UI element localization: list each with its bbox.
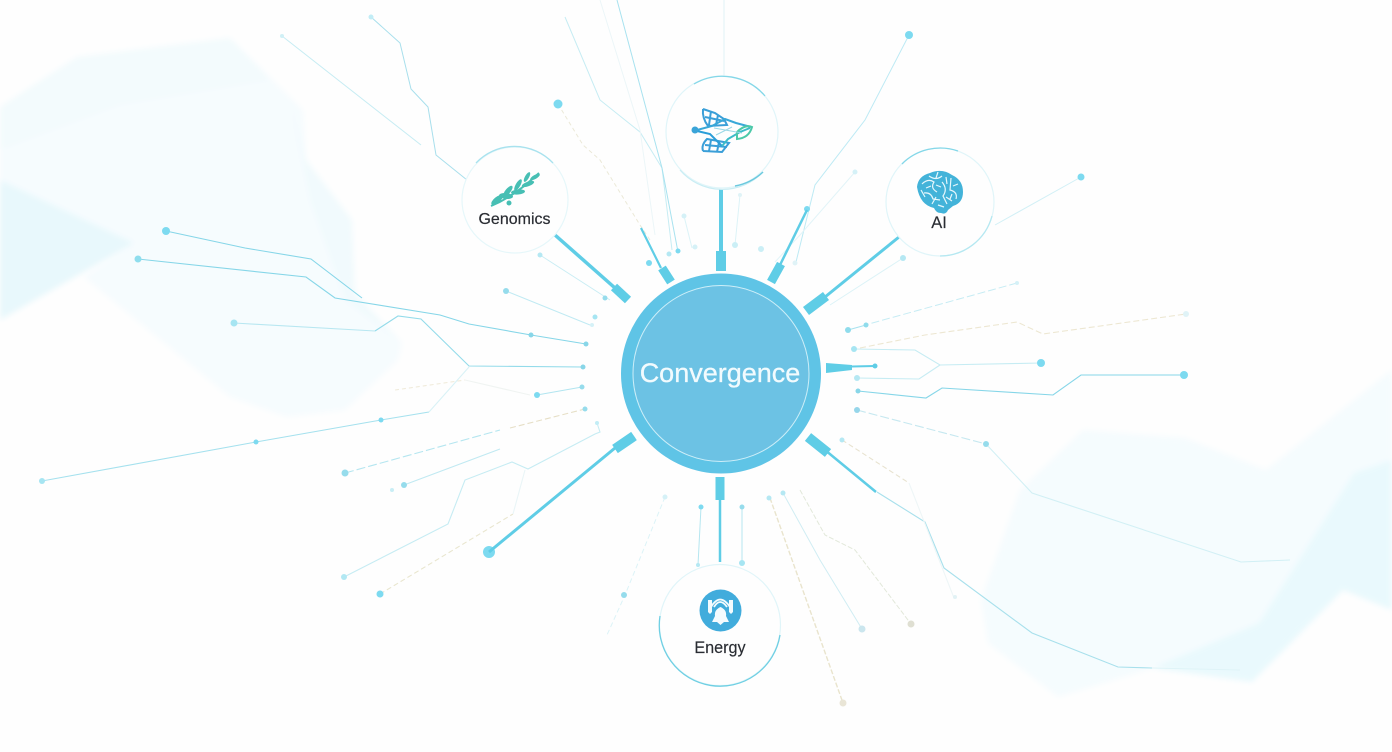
connector: lower left to hub [489,436,634,552]
label: Genomics: Genomics [478,211,551,228]
connector: AI to hub [806,237,899,311]
background wash: right [981,370,1392,697]
connector: Energy to hub [719,477,721,562]
background wash: left [0,38,402,417]
central hub: Convergence [621,274,821,474]
circuit traces: upper left [282,0,1081,325]
connector: upper left to hub [641,228,671,282]
connector: Genomics to hub [555,235,628,300]
trace end nodes [39,14,1189,706]
connector: lower right stub [808,437,876,492]
circuit traces: right [842,314,1290,670]
icon: brain [917,171,963,214]
label: AI: AI [931,214,947,232]
node: AI [886,148,994,256]
hub label: Convergence [640,358,800,388]
icon: energy badge [700,590,742,632]
icon: DNA helix [692,109,752,152]
circuit traces: left [42,231,600,594]
node: Genomics [462,146,568,253]
connector: right stub [826,363,878,373]
connector: top node to hub [719,189,723,271]
circuit traces: lower [607,490,911,703]
icon: olive branch [490,171,541,207]
node: Energy [659,564,780,686]
node: DNA (top) [666,76,778,189]
connector: upper right to hub [771,210,807,282]
label: Energy: Energy [694,639,747,657]
